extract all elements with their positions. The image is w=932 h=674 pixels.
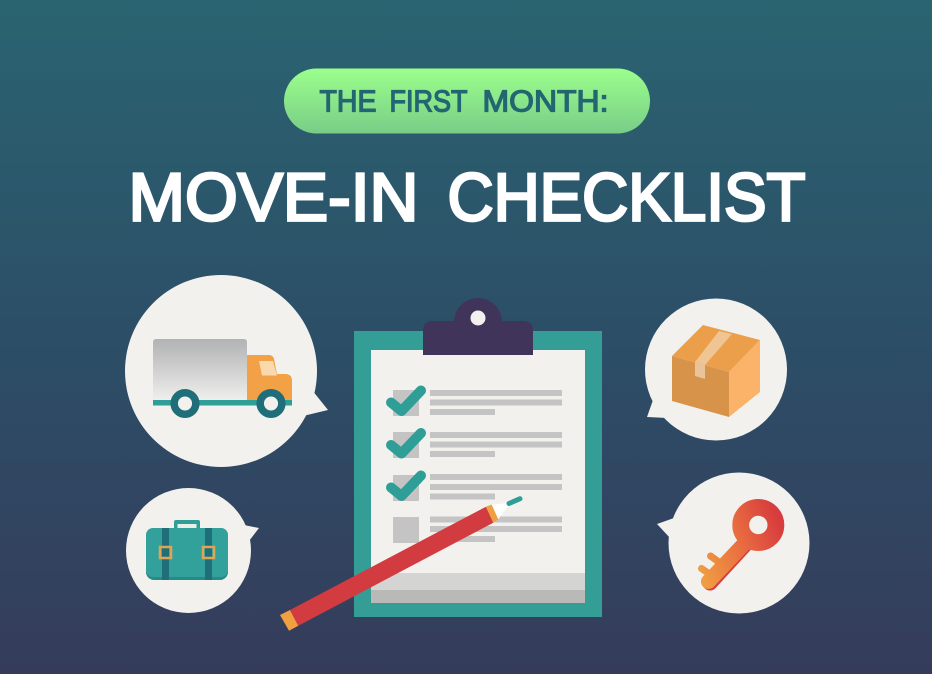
title: MOVE-IN	[128, 160, 418, 236]
checklist row 1	[391, 390, 562, 416]
bubble: moving truck	[125, 275, 328, 467]
pencil	[280, 499, 520, 631]
clipboard	[354, 298, 602, 617]
bubble: key	[657, 472, 810, 614]
checklist row 2	[391, 432, 562, 458]
icon: truck	[153, 339, 292, 414]
bubble: suitcase	[126, 488, 259, 613]
subtitle pill	[284, 68, 650, 134]
clip	[423, 298, 533, 355]
subtitle pill: MONTH:	[482, 84, 608, 118]
checklist row 3	[391, 474, 562, 501]
clipboard board	[354, 331, 602, 617]
title: CHECKLIST	[448, 160, 806, 236]
icon: box	[672, 325, 760, 417]
icon: key	[702, 507, 776, 583]
subtitle pill: THE	[320, 84, 376, 118]
icon: suitcase	[146, 520, 228, 580]
paper sheet	[371, 350, 585, 603]
subtitle pill: FIRST	[390, 84, 468, 118]
checklist row 4	[393, 516, 562, 543]
bubble: cardboard box	[645, 298, 787, 440]
